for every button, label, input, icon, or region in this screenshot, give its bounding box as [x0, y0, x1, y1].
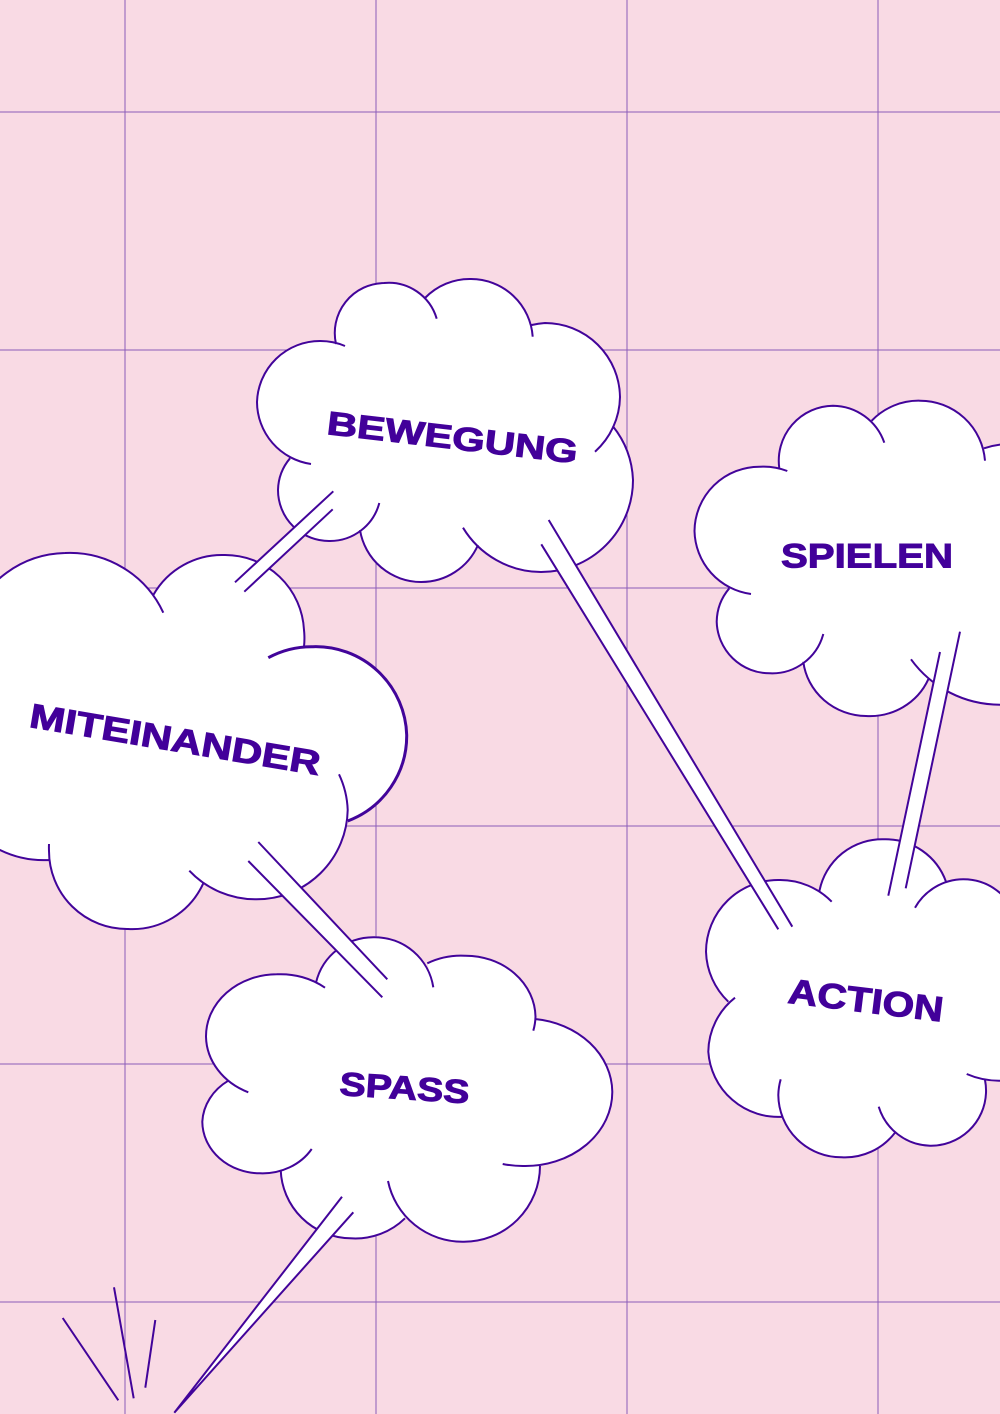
label: Bewegung: BEWEGUNG	[325, 404, 580, 470]
cloud: Action	[706, 839, 1000, 1157]
label: Action: ACTION	[786, 972, 946, 1030]
burst lines	[63, 1287, 155, 1400]
label: Spielen: SPIELEN	[781, 538, 953, 576]
label: Miteinander: MITEINANDER	[27, 697, 323, 783]
cloud: Spielen	[694, 401, 1000, 716]
connector: Spielen to Action	[888, 632, 960, 896]
connector: Spass to burst	[174, 1197, 353, 1413]
label: Spass: SPASS	[339, 1065, 471, 1110]
connector: Bewegung to Miteinander	[235, 491, 333, 592]
cloud: Spass	[202, 937, 612, 1242]
connector: Bewegung to Action	[541, 520, 792, 929]
cloud: Bewegung	[257, 279, 633, 582]
cloud: Miteinander	[0, 553, 407, 929]
connector: Miteinander to Spass	[248, 842, 387, 997]
